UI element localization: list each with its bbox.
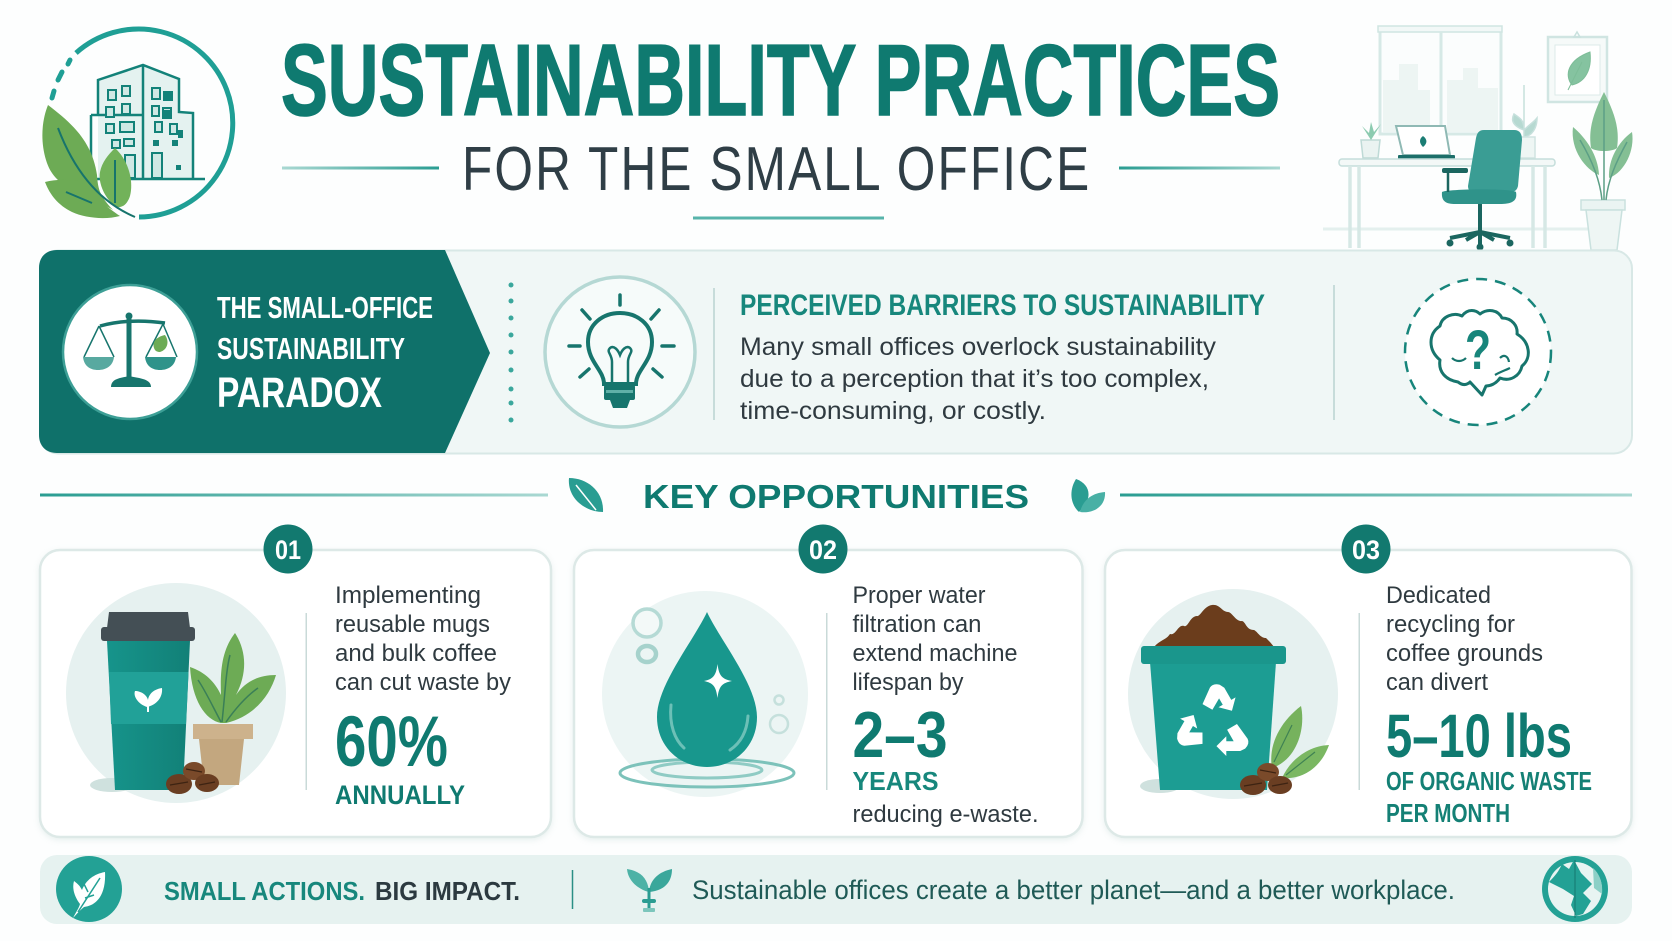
card 02: water filtration	[574, 524, 1082, 837]
text: mugs description: and bulk coffee	[335, 640, 497, 667]
icon: brain with question mark: ?	[1465, 318, 1491, 381]
text: recycling description	[1386, 582, 1543, 696]
stat: 60% annually: 60%	[335, 703, 448, 782]
tagline: BIG IMPACT.	[375, 876, 520, 906]
badge 03: 03	[1352, 535, 1380, 565]
badge 01: 01	[275, 535, 301, 565]
barriers body text: due to a perception that it’s too complex,	[740, 365, 1209, 393]
text: filtration description	[852, 582, 1018, 696]
icon: right leaf pair	[1071, 479, 1105, 512]
text: recycling description: coffee grounds	[1386, 640, 1543, 667]
text: filtration description: filtration can	[852, 611, 982, 638]
icon: sprout	[627, 869, 672, 912]
text: mugs description: can cut waste by	[335, 669, 511, 696]
icon: light bulb	[545, 277, 695, 427]
section heading: key opportunities	[40, 478, 1632, 515]
text: recycling description: can divert	[1386, 669, 1488, 696]
text: reducing e-waste: reducing e-waste.	[852, 801, 1038, 828]
illustration: water drop	[602, 591, 808, 797]
icon: balance scale	[63, 285, 197, 419]
icon: brain with question mark	[1405, 279, 1551, 425]
illustration: recycling bin with grounds	[1128, 589, 1338, 799]
text: recycling description: recycling for	[1386, 611, 1515, 638]
footer sentence: Sustainable offices create a better planet—and a better workplace.	[692, 875, 1455, 905]
section heading: key opportunities: KEY OPPORTUNITIES	[643, 478, 1029, 515]
barriers body text: Many small offices overlock sustainability	[740, 333, 1217, 361]
paradox arrow banner	[39, 250, 490, 453]
barriers heading: PERCEIVED BARRIERS TO SUSTAINABILITY	[740, 289, 1265, 322]
paradox heading: SUSTAINABILITY	[217, 331, 405, 366]
stat: 60% annually	[335, 703, 465, 810]
stat: 5–10 lbs of organic waste per month: 5–10 lbs	[1386, 702, 1572, 770]
text: mugs description: reusable mugs	[335, 611, 490, 638]
barriers body text: time-consuming, or costly.	[740, 397, 1046, 425]
stat: 5–10 lbs of organic waste per month	[1386, 702, 1592, 828]
tagline	[164, 876, 520, 906]
card 01: reusable mugs	[40, 524, 551, 837]
footer banner	[40, 855, 1632, 924]
icon: recycling arrows	[1169, 678, 1248, 756]
text: filtration description: lifespan by	[852, 669, 964, 696]
stat: 2–3 years: 2–3	[852, 698, 948, 771]
badge 02	[798, 524, 848, 574]
text: mugs description	[335, 582, 511, 696]
stat: 60% annually: ANNUALLY	[335, 780, 465, 810]
stat: 2–3 years: YEARS	[852, 766, 938, 796]
logo: building in ring with leaves	[42, 29, 233, 218]
subtitle: FOR THE SMALL OFFICE	[462, 134, 1089, 203]
card 03: coffee grounds recycling	[1105, 524, 1632, 837]
illustration: office desk scene	[1323, 26, 1633, 250]
subtitle	[282, 134, 1280, 220]
text: mugs description: Implementing	[335, 582, 481, 609]
icon: globe	[1542, 856, 1608, 922]
panel: paradox and perceived barriers	[39, 250, 1632, 454]
illustration: reusable cup, plant and beans	[66, 583, 286, 803]
badge 02: 02	[809, 535, 837, 565]
paradox heading: THE SMALL-OFFICE	[217, 290, 433, 325]
paradox heading	[217, 290, 433, 417]
tagline: SMALL ACTIONS.	[164, 876, 365, 906]
icon: left leaf	[569, 478, 603, 512]
stat: 5–10 lbs of organic waste per month: PER MONTH	[1386, 798, 1510, 828]
icon: leaf badge	[56, 856, 122, 922]
text: filtration description: extend machine	[852, 640, 1018, 667]
badge 03	[1342, 524, 1390, 574]
stat: 5–10 lbs of organic waste per month: OF ORGANIC WASTE	[1386, 766, 1592, 796]
barriers body text	[740, 333, 1217, 425]
stat: 2–3 years	[852, 698, 948, 796]
paradox heading: PARADOX	[217, 369, 382, 417]
text: recycling description: Dedicated	[1386, 582, 1491, 609]
badge 01	[264, 524, 312, 574]
text: filtration description: Proper water	[852, 582, 986, 609]
